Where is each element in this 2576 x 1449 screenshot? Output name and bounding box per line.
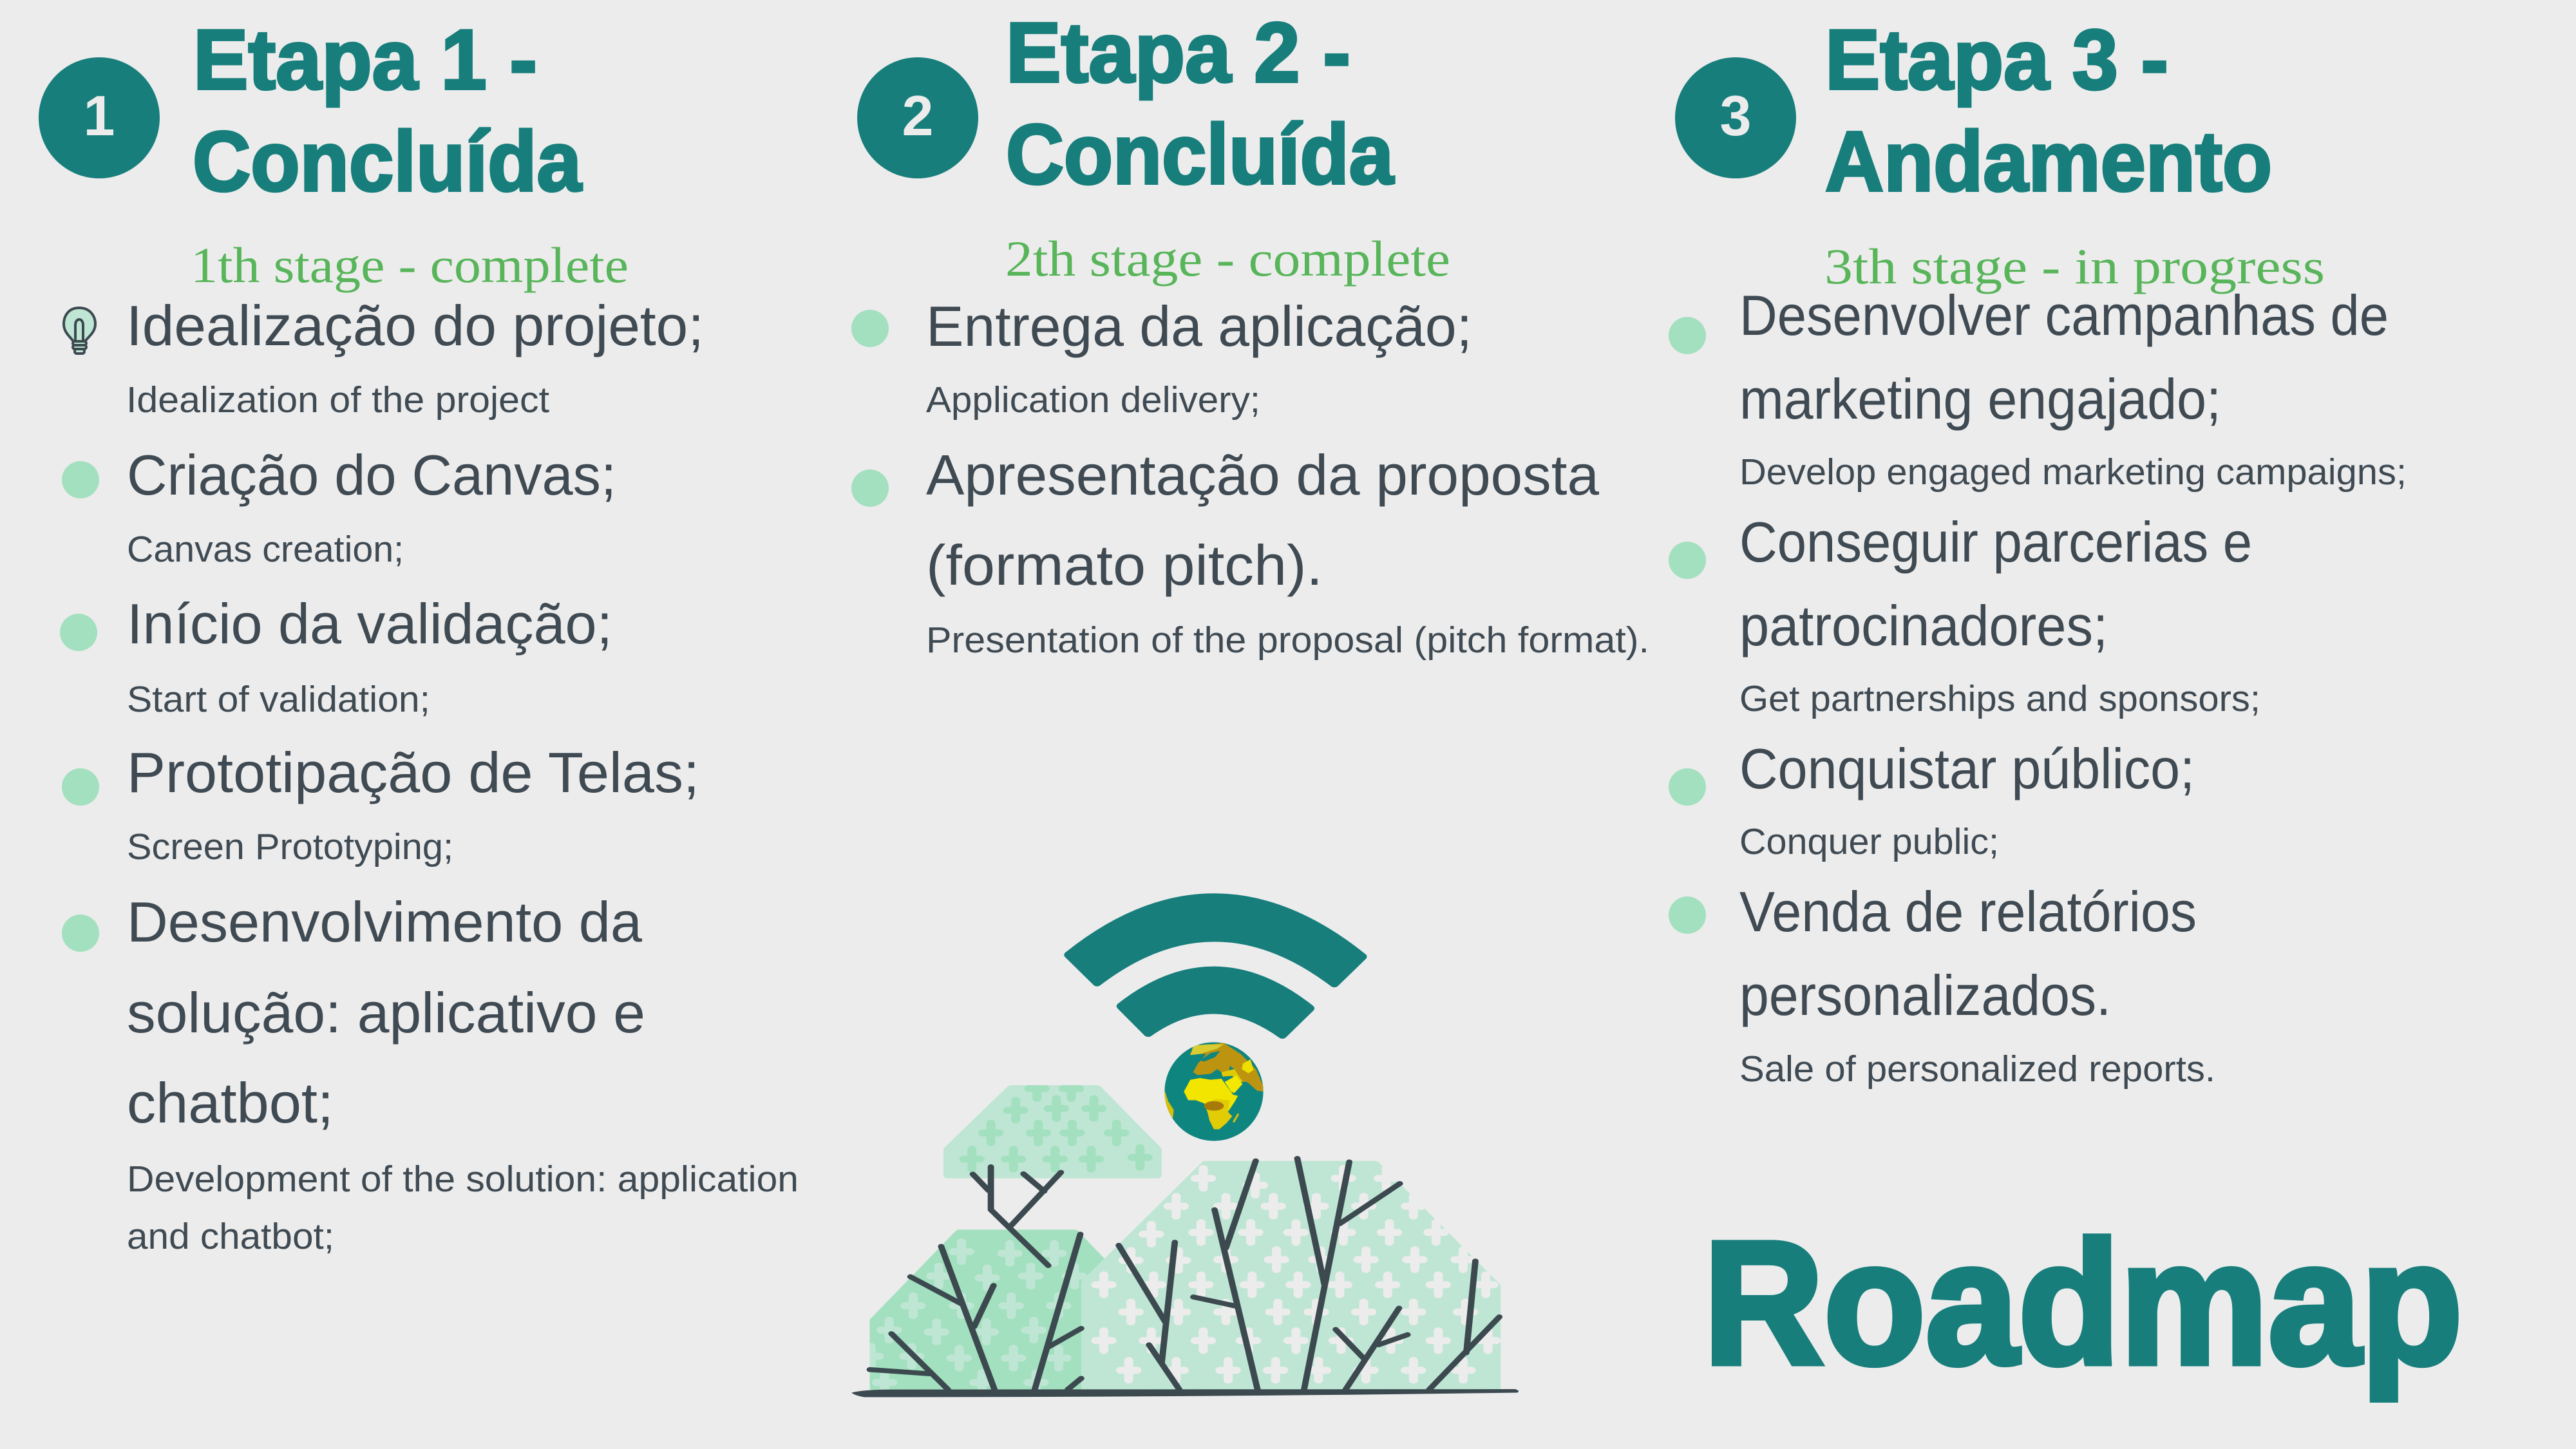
column 2: stage 2 [851, 5, 1649, 661]
item: solution development: Development of the solution: application [127, 1159, 799, 1200]
title: Roadmap: Roadmap [1703, 1205, 2463, 1401]
heading: stage 1 [193, 12, 582, 209]
item: pitch: (formato pitch). [926, 533, 1323, 597]
item: audience: Conquer public; [1739, 821, 1999, 862]
step badge 2 [857, 57, 978, 178]
illustration: trees, wifi and globe [851, 897, 1519, 1397]
item: audience [1669, 737, 2195, 862]
item: partnerships [1669, 510, 2260, 719]
item: partnerships: patrocinadores; [1739, 594, 2108, 658]
item: pitch: Apresentação da proposta [926, 443, 1599, 507]
item: idealization [126, 294, 704, 421]
item: reports: personalizados. [1739, 963, 2111, 1027]
item: delivery: Application delivery; [926, 379, 1260, 421]
subtitle: stage 1: 1th stage - complete [191, 237, 629, 293]
icon: light bulb [64, 308, 95, 354]
item: partnerships: Get partnerships and sponsors; [1739, 678, 2260, 719]
tree: small top foliage [948, 1079, 1157, 1175]
item: audience: Conquistar público; [1739, 737, 2195, 800]
item: canvas: Criação do Canvas; [127, 443, 616, 507]
step badge 1: 1 [84, 84, 115, 147]
item: delivery: Entrega da aplicação; [926, 294, 1472, 358]
item: solution development: and chatbot; [127, 1216, 334, 1257]
column 1: stage 1 [39, 12, 799, 1257]
item: solution development: chatbot; [127, 1071, 334, 1135]
heading: stage 1: Etapa 1 - [193, 12, 537, 107]
icon: globe [1163, 1042, 1264, 1141]
step badge 3: 3 [1720, 84, 1751, 147]
heading: stage 3: Andamento [1825, 114, 2272, 209]
item: partnerships: Conseguir parcerias e [1739, 510, 2252, 574]
item: campaigns: Develop engaged marketing campaigns; [1739, 451, 2407, 493]
item: prototyping: Screen Prototyping; [127, 826, 453, 867]
item: reports: Sale of personalized reports. [1739, 1048, 2215, 1090]
item: reports [1669, 880, 2215, 1090]
item: campaigns [1669, 283, 2407, 493]
item: idealization: Idealization of the project [126, 379, 549, 421]
item: idealization: Idealização do projeto; [126, 294, 704, 357]
heading: stage 2: Etapa 2 - [1006, 5, 1350, 100]
item: canvas: Canvas creation; [127, 529, 404, 570]
item: pitch [851, 443, 1649, 661]
item: prototyping: Prototipação de Telas; [127, 741, 699, 804]
tree branches [870, 1159, 1499, 1390]
icon: wifi arcs [1068, 897, 1362, 1035]
step badge 3 [1675, 57, 1796, 178]
heading: stage 1: Concluída [193, 114, 582, 209]
item: delivery [851, 294, 1472, 421]
tree: large right foliage [1086, 1164, 1496, 1388]
tree: dark left foliage [869, 1229, 1104, 1390]
item: pitch: Presentation of the proposal (pitch format). [926, 620, 1649, 661]
item: validation: Start of validation; [127, 679, 430, 720]
heading: stage 2: Concluída [1006, 107, 1394, 202]
heading: stage 3: Etapa 3 - [1825, 12, 2168, 107]
item: solution development: Desenvolvimento da [127, 890, 642, 954]
step badge 2: 2 [902, 84, 933, 147]
subtitle: stage 2: 2th stage - complete [1005, 231, 1450, 287]
item: campaigns: marketing engajado; [1739, 367, 2221, 431]
column 3: stage 3 [1669, 12, 2407, 1090]
heading: stage 3 [1825, 12, 2272, 209]
item: prototyping [62, 741, 699, 867]
item: reports: Venda de relatórios [1739, 880, 2197, 943]
item: solution development [62, 890, 799, 1257]
ground line [851, 1389, 1519, 1397]
subtitle: stage 3: 3th stage - in progress [1824, 238, 2325, 294]
item: campaigns: Desenvolver campanhas de [1739, 283, 2389, 347]
item: validation: Início da validação; [127, 592, 612, 656]
step badge 1 [39, 57, 160, 178]
heading: stage 2 [1006, 5, 1394, 202]
item: canvas [62, 443, 616, 570]
item: solution development: solução: aplicativo e [127, 981, 645, 1045]
item: validation [60, 592, 612, 720]
